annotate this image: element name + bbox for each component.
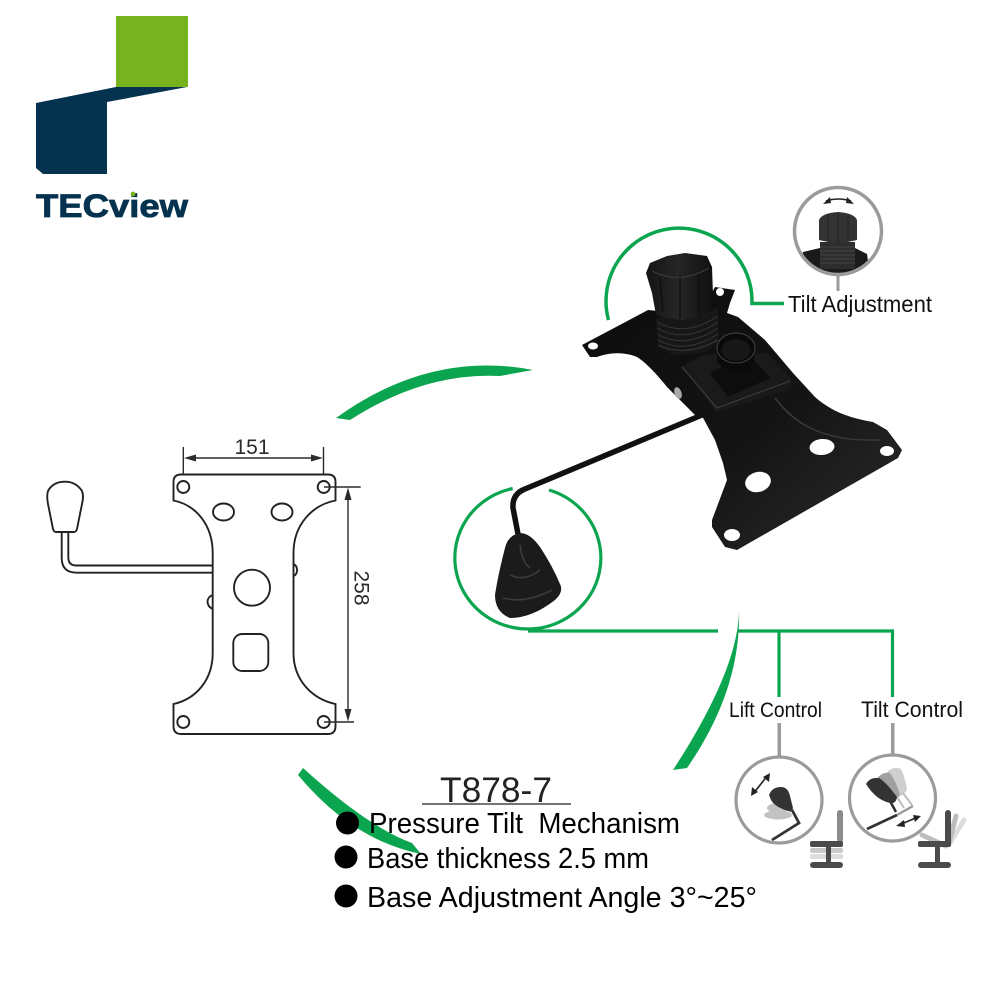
logo green square xyxy=(116,16,188,87)
ring xyxy=(850,755,936,841)
rotation arrow xyxy=(823,197,854,204)
model heading: T878-7 xyxy=(440,771,552,810)
logo: TECview xyxy=(36,16,188,224)
technical drawing: plate with lever xyxy=(47,474,336,734)
side bumps xyxy=(208,564,297,609)
label: Tilt Adjustment xyxy=(788,291,933,317)
green arc: tilt adjustment callout xyxy=(606,228,784,320)
lever knob xyxy=(495,533,561,618)
lever knob detail xyxy=(503,545,552,600)
chair icon: tilt xyxy=(918,810,964,868)
spec: adjustment angle: Base Adjustment Angle 3°~25° xyxy=(367,882,757,914)
lever knob xyxy=(47,482,83,532)
green arc: lever callout xyxy=(455,488,718,631)
plate holes xyxy=(588,288,894,541)
logo green dot xyxy=(131,192,135,196)
dimension: 258 xyxy=(324,487,372,722)
double arrow xyxy=(896,815,921,827)
tilt adjustment inset image xyxy=(800,212,870,275)
ring xyxy=(736,757,822,843)
threaded shaft and knob xyxy=(646,253,718,355)
metal base plate xyxy=(582,287,902,550)
raised pyramid housing xyxy=(682,353,792,412)
dimension: 151 xyxy=(183,436,324,474)
chair icon: lift xyxy=(810,810,843,868)
rivet xyxy=(673,386,683,400)
callout: tilt adjustment xyxy=(788,188,933,317)
mounting holes xyxy=(177,481,330,728)
centre hole xyxy=(234,570,270,606)
spec list xyxy=(334,808,757,914)
spec: pressure tilt mechanism: Pressure Tilt Mechanism xyxy=(369,808,680,840)
green swoosh: lower left xyxy=(298,768,421,854)
knob and rod xyxy=(769,787,799,840)
ghost knobs xyxy=(878,768,912,808)
callout: lift control xyxy=(729,699,843,868)
connector xyxy=(891,723,894,756)
tube socket xyxy=(717,333,755,373)
lever rod xyxy=(62,533,213,573)
spec: base thickness: Base thickness 2.5 mm xyxy=(367,843,649,875)
label: Lift Control xyxy=(729,699,822,722)
oval slots xyxy=(213,504,292,520)
dimension: 258: 258 xyxy=(350,570,372,606)
tilt adjustment ring xyxy=(794,188,882,274)
green swoosh: upper xyxy=(336,365,533,420)
green branch lines xyxy=(738,631,892,697)
green swoosh: right xyxy=(673,611,739,770)
square hole xyxy=(233,634,268,671)
dimension: 151: 151 xyxy=(234,436,270,459)
logo navy shape xyxy=(36,87,187,174)
callout: tilt control xyxy=(850,697,964,868)
label: Tilt Control xyxy=(861,697,963,722)
connector xyxy=(836,275,840,291)
plate ridge highlight xyxy=(775,398,880,440)
ghost knobs xyxy=(764,803,792,820)
lever rod xyxy=(513,415,702,534)
knob and rod xyxy=(866,778,913,829)
double arrow xyxy=(751,773,770,796)
product photo: mechanism xyxy=(455,228,902,631)
logo wordmark: TECview xyxy=(36,188,188,224)
plate outline xyxy=(174,474,336,734)
connector xyxy=(778,723,781,756)
